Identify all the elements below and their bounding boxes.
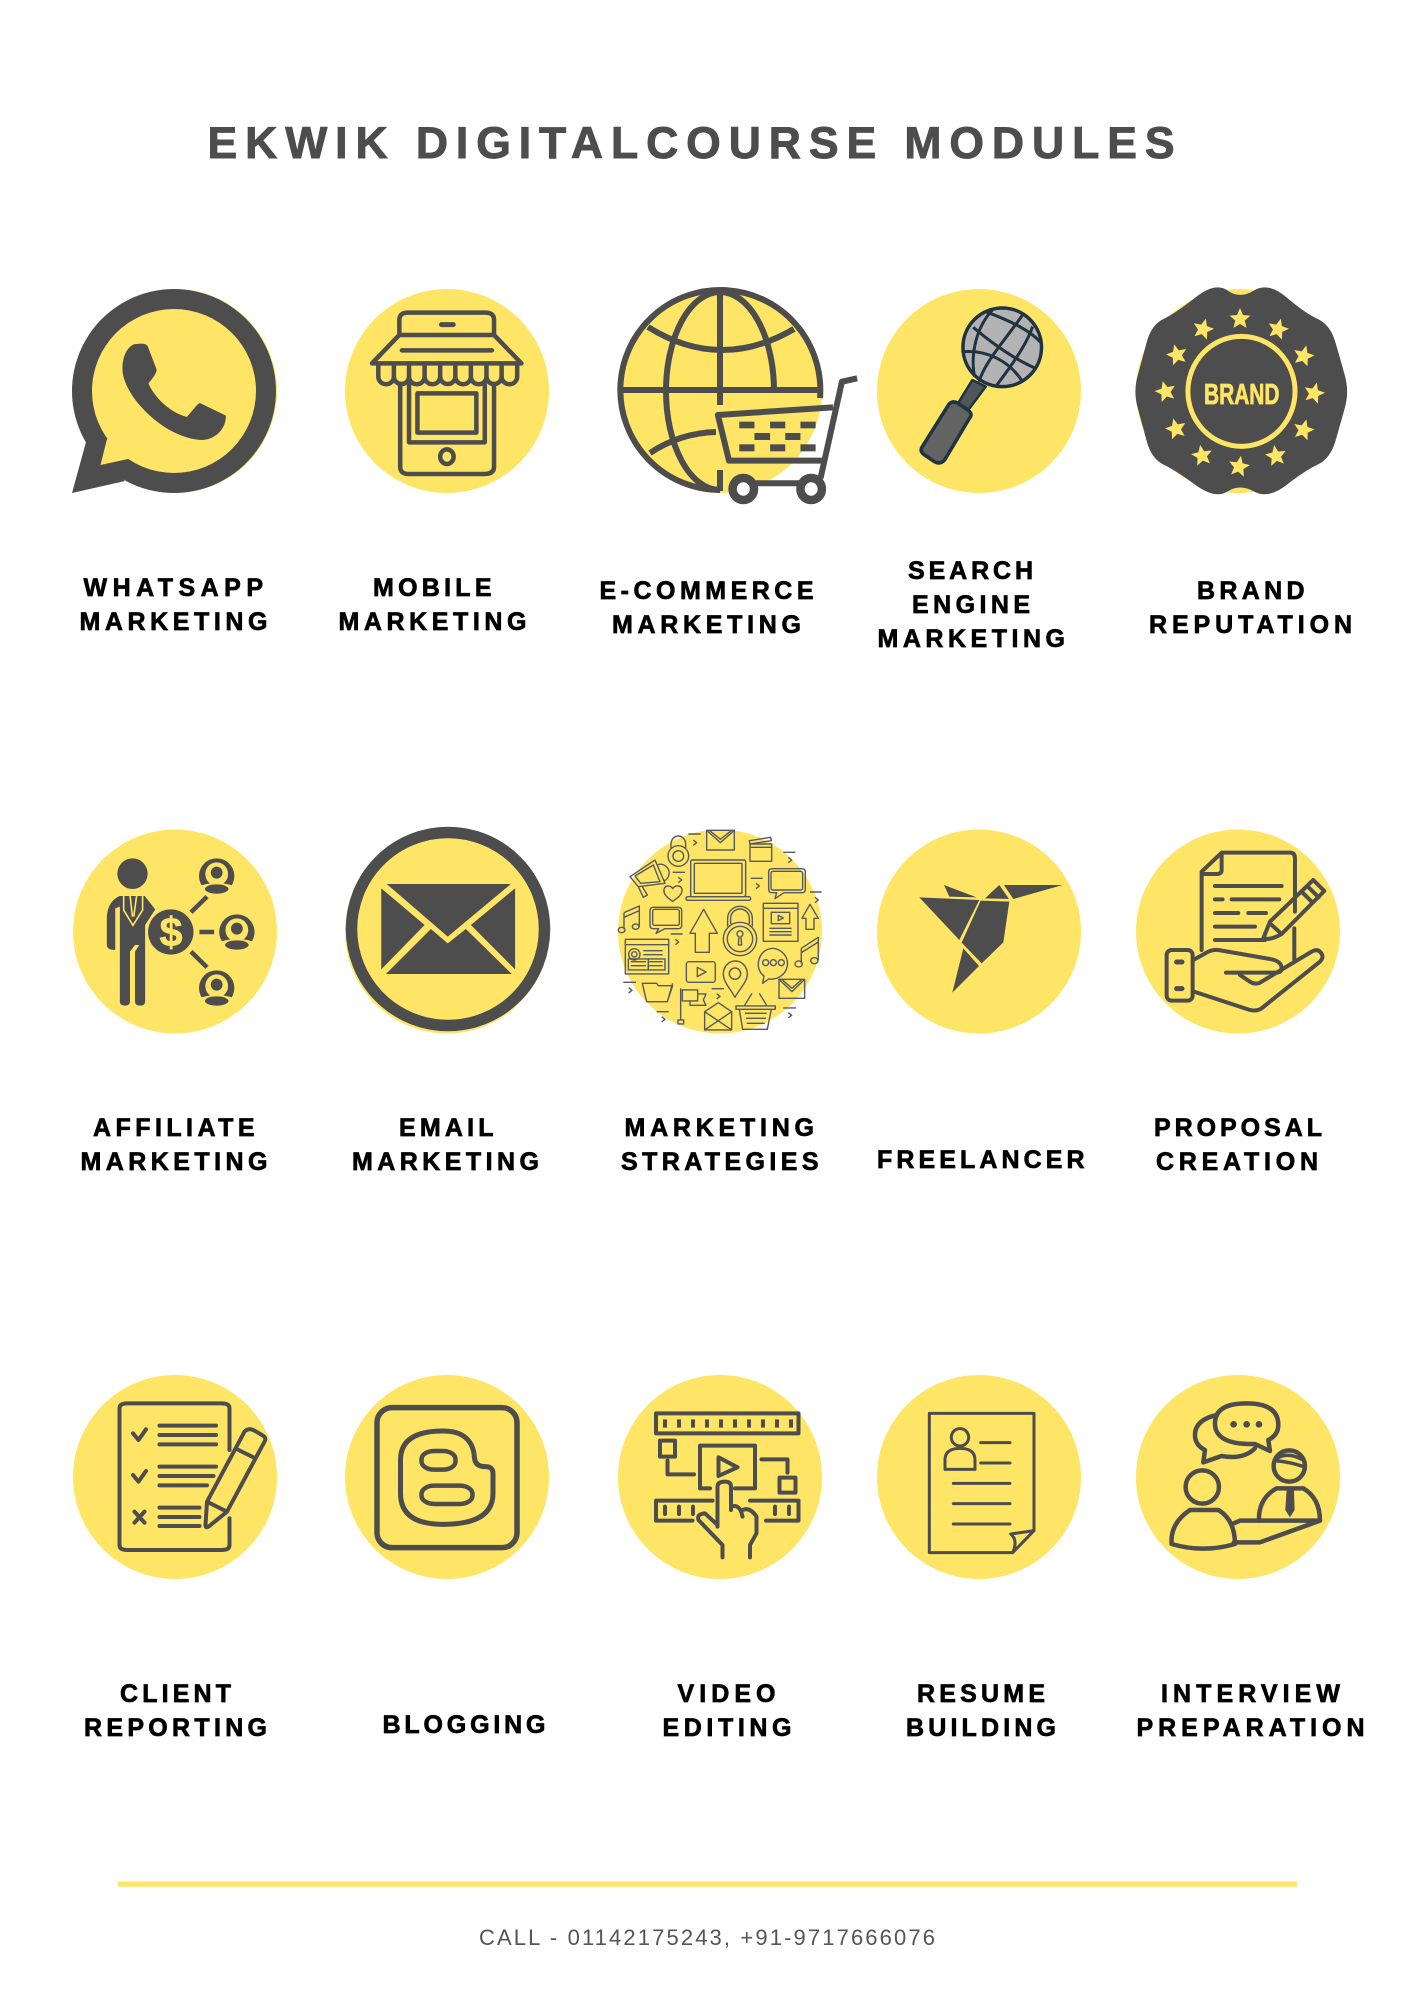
label <box>662 1680 792 1742</box>
label: SEARCH <box>908 557 1033 585</box>
module: video editing <box>618 1375 822 1742</box>
module: client reporting <box>73 1375 277 1742</box>
module: search engine marketing <box>877 289 1081 653</box>
icon: envelope <box>345 830 549 1034</box>
label: INTERVIEW <box>1161 1680 1340 1708</box>
module: interview preparation <box>1136 1375 1364 1742</box>
label: WHATSAPP <box>84 574 263 602</box>
label: AFFILIATE <box>93 1114 254 1142</box>
module: freelancer <box>877 830 1084 1174</box>
icon: resume page <box>877 1375 1081 1579</box>
icon: whatsapp <box>72 289 277 493</box>
label: CLIENT <box>120 1680 231 1708</box>
label <box>1149 577 1352 639</box>
label: E-COMMERCE <box>600 577 814 605</box>
label: MOBILE <box>373 574 492 602</box>
label: RESUME <box>917 1680 1045 1708</box>
label: CREATION <box>1156 1148 1318 1176</box>
label: MARKETING <box>624 1114 814 1142</box>
label: MARKETING <box>80 1148 268 1176</box>
icon: interview <box>1136 1375 1340 1579</box>
footer contact text: CALL - 01142175243, +91-9717666076 <box>479 1925 935 1950</box>
module: e-commerce marketing <box>600 289 857 639</box>
title: EKWIK DIGITALCOURSE MODULES <box>208 119 1174 168</box>
icon: origami bird <box>877 830 1081 1034</box>
label: REPORTING <box>84 1714 267 1742</box>
label <box>1136 1680 1364 1742</box>
icon: report checklist <box>73 1375 277 1579</box>
icon: proposal in hand <box>1136 830 1340 1034</box>
label <box>80 1114 268 1176</box>
label: PROPOSAL <box>1154 1114 1322 1142</box>
icon: blogger logo <box>345 1375 549 1579</box>
label: BUILDING <box>906 1714 1056 1742</box>
label: EMAIL <box>399 1114 494 1142</box>
module: blogging <box>345 1375 549 1739</box>
icon: globe with cart <box>618 289 857 500</box>
label <box>878 557 1065 653</box>
label <box>1154 1114 1322 1176</box>
label <box>80 574 268 636</box>
module: brand reputation <box>1135 287 1352 639</box>
module: mobile marketing <box>338 289 549 636</box>
module: marketing strategies <box>618 830 822 1176</box>
module: affiliate marketing <box>73 830 277 1176</box>
icon: video timeline <box>618 1375 822 1579</box>
module: proposal creation <box>1136 830 1340 1176</box>
icon: brand badge: BRAND <box>1204 379 1280 411</box>
label: BRAND <box>1197 577 1304 605</box>
icon: affiliate network <box>73 830 277 1034</box>
icon: magnifier <box>877 289 1081 493</box>
label: MARKETING <box>80 608 268 636</box>
icon: mobile shop <box>345 289 549 493</box>
label <box>906 1680 1056 1742</box>
icon: affiliate network: $ <box>160 909 183 955</box>
label: MARKETING <box>612 611 801 639</box>
label: MARKETING <box>338 608 526 636</box>
icon: brand badge <box>1135 287 1347 494</box>
footer divider line <box>118 1882 1297 1887</box>
label <box>600 577 814 639</box>
label: BLOGGING <box>382 1711 546 1739</box>
label: VIDEO <box>678 1680 776 1708</box>
module: WhatsApp marketing <box>72 289 277 636</box>
label: FREELANCER <box>877 1146 1084 1174</box>
label: PREPARATION <box>1136 1714 1364 1742</box>
label <box>352 1114 539 1176</box>
label: REPUTATION <box>1149 611 1352 639</box>
module: email marketing <box>345 830 549 1176</box>
label <box>84 1680 267 1742</box>
label: STRATEGIES <box>621 1148 818 1176</box>
module: resume building <box>877 1375 1081 1742</box>
label: MARKETING <box>352 1148 539 1176</box>
label: ENGINE <box>912 591 1030 619</box>
label: MARKETING <box>878 625 1065 653</box>
label <box>621 1114 818 1176</box>
icon: marketing collage <box>618 830 822 1034</box>
label: EDITING <box>662 1714 792 1742</box>
label <box>338 574 526 636</box>
